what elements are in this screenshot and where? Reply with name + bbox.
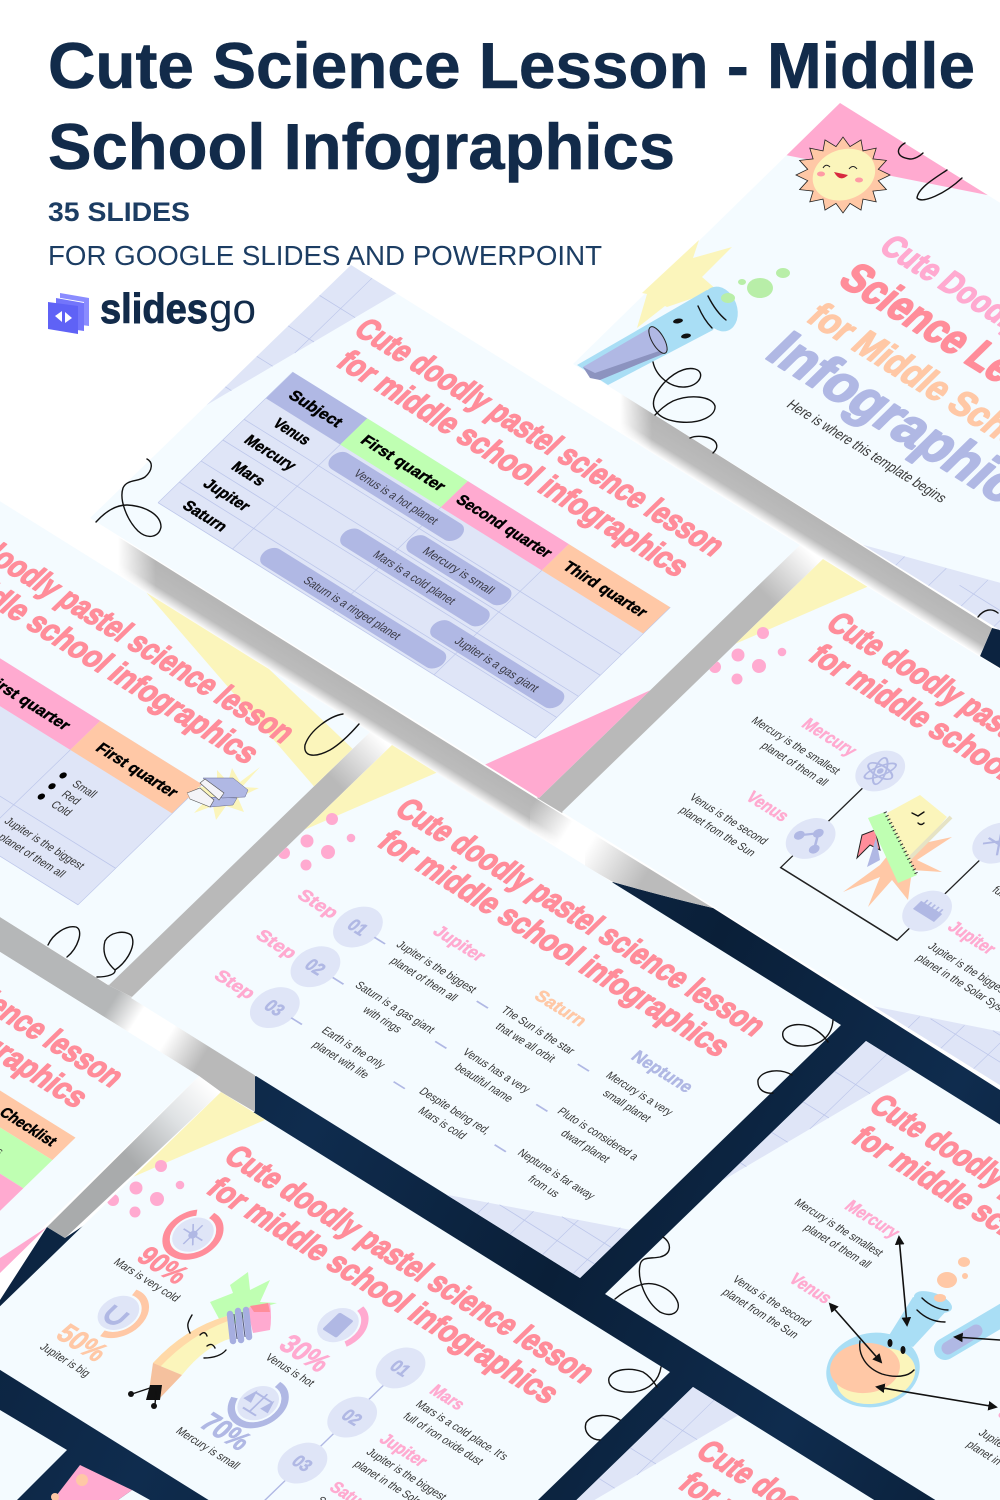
illustration: pencil character [128, 1272, 277, 1409]
stat 90% [111, 1196, 245, 1304]
step rows: Earth is the only [319, 1025, 388, 1071]
slide: ruler diagram [562, 559, 1000, 1092]
labels [707, 1176, 1000, 1500]
slide: steps [131, 745, 841, 1278]
labels: Mercury is the smallest [748, 715, 843, 777]
table: Mercury is small [419, 545, 497, 597]
icon: yellow burst [637, 240, 732, 328]
timeline: 02 [337, 1405, 367, 1429]
squiggles on lower slides [585, 610, 998, 1440]
step rows: Saturn is a gas giant [352, 980, 437, 1036]
title: for middle school infographics [199, 1171, 568, 1410]
step rows: 03 [260, 996, 290, 1020]
timeline [245, 1340, 548, 1500]
icon: sun [796, 137, 890, 213]
stat 70% [173, 1364, 305, 1472]
table [158, 372, 670, 738]
labels: Mercury [798, 715, 862, 760]
grey shadow bands between slides [0, 380, 992, 1238]
stat 30% [262, 1289, 382, 1389]
table: Saturn [178, 498, 231, 535]
table: Venus is a hot planet [350, 467, 442, 528]
icon: test tube [577, 268, 790, 385]
table: Second quarter [452, 492, 556, 562]
illustration: flask [820, 1257, 1000, 1415]
step rows: Mercury is a very [603, 1070, 676, 1119]
table: First quarter [356, 433, 449, 495]
step rows: dwarf planet [558, 1128, 612, 1165]
labels: Mercury is the smallest [791, 1197, 886, 1259]
labels: planet from the Sun [676, 805, 758, 859]
checklist table [0, 1067, 76, 1221]
labels: Venus is the second [686, 792, 770, 847]
slide: pink corner partial [51, 1465, 150, 1500]
squiggles on left slide [48, 714, 359, 977]
slide count: 35 SLIDES [48, 197, 190, 227]
timeline: Jupiter [375, 1430, 432, 1471]
step rows: with rings [359, 1004, 405, 1036]
step rows [200, 856, 710, 1222]
step rows: Step [251, 926, 302, 962]
step rows: 02 [300, 955, 330, 979]
icon blobs [775, 742, 1000, 939]
table: Mars [227, 459, 269, 490]
timeline: 03 [287, 1451, 317, 1475]
decorative dots: progress slide [107, 1160, 184, 1218]
step rows: Step [293, 885, 343, 922]
step rows: from us [525, 1174, 562, 1200]
step rows: that we all orbit [492, 1021, 558, 1065]
slide: table with quarters [90, 265, 800, 798]
labels: planet from the Sun [719, 1287, 801, 1341]
table: Mercury [240, 433, 300, 474]
labels: Venus is the second [729, 1274, 813, 1329]
timeline: Mars [425, 1381, 470, 1414]
step rows: Step [210, 966, 260, 1003]
title: Cute doodly pastel science lesson [217, 1138, 604, 1389]
step rows: Jupiter is the biggest [393, 939, 479, 996]
table: Third quarter [559, 559, 651, 621]
title: for middle school infographics [370, 824, 739, 1063]
table: Saturn is a ringed planet [300, 574, 404, 643]
title: Cute doodly pastel science lesson [388, 791, 775, 1042]
arrows [830, 1237, 1000, 1407]
table: Jupiter is the biggest [1, 815, 87, 872]
logo: slidesgo: slides [100, 285, 208, 332]
step rows: planet with life [309, 1039, 372, 1081]
stat 70%: Mercury is small [173, 1425, 242, 1472]
stat 90%: 90% [130, 1241, 195, 1290]
step rows: Mars is cold [415, 1105, 469, 1142]
step rows: Pluto is considered a [554, 1106, 642, 1163]
table: Cold [48, 799, 74, 819]
table: Red [58, 789, 83, 807]
step rows: small planet [600, 1088, 653, 1125]
table: Mars is a cold planet [370, 548, 459, 608]
labels: planet of them all [801, 1222, 874, 1271]
title: Cute doodly pastel science lesson [347, 311, 734, 562]
labels: Venus [785, 1270, 837, 1307]
step rows: Venus has a very [459, 1047, 533, 1096]
step rows: Despite being red, [416, 1086, 493, 1137]
illustration: ruler and set square [843, 795, 952, 907]
logo: slidesgo [48, 285, 256, 334]
table: Jupiter is a gas giant [451, 635, 542, 695]
labels: Venus [742, 788, 794, 825]
table: First quarter [92, 741, 181, 801]
decorative dots: ruler slide [709, 627, 786, 684]
header title [48, 29, 975, 183]
stat 70%: 70% [193, 1407, 258, 1456]
slide: bottom-left table remnant [0, 796, 199, 1329]
slide: bottom-left partial [0, 1410, 67, 1500]
header title: School Infographics [48, 110, 675, 183]
labels: Jupiter [943, 917, 1000, 958]
subtitle: FOR GOOGLE SLIDES AND POWERPOINT [48, 240, 602, 271]
squiggles on cover [653, 143, 962, 453]
labels: planet of them all [758, 740, 831, 789]
slide: progress percentages [0, 1092, 670, 1500]
stat 30%: 30% [273, 1329, 337, 1378]
table [0, 565, 202, 905]
table: Small [69, 778, 99, 801]
step rows: beautiful name [452, 1062, 516, 1105]
timeline: full of iron oxide dust [400, 1411, 486, 1467]
step rows: planet of them all [387, 955, 460, 1004]
pink corner on remnant slide [0, 1227, 47, 1273]
squiggle on table slide [96, 459, 161, 536]
slide: checklist table left [0, 452, 370, 985]
icon: books [184, 767, 260, 820]
step rows: The Sun is the star [498, 1004, 578, 1057]
timeline: Mars is a cold place. It's [413, 1399, 511, 1463]
step rows: Neptune is far away [515, 1147, 598, 1202]
table: Jupiter [199, 476, 254, 515]
stat 50%: Jupiter is big [37, 1341, 93, 1380]
logo: slidesgo: go [209, 285, 256, 332]
table: Venus [269, 416, 314, 449]
title: for middle school infographics [329, 344, 698, 583]
decorative dots: steps slide [278, 813, 355, 870]
slide: title cover [573, 103, 1000, 644]
timeline: 01 [385, 1356, 416, 1380]
header title: Cute Science Lesson - Middle [48, 29, 975, 102]
slide: title cover: Here is where this template begins [783, 397, 950, 506]
table: Subject [284, 388, 346, 431]
step rows: Jupiter [429, 922, 491, 965]
step rows: Saturn [530, 986, 592, 1030]
stat 90%: Mars is very cold [111, 1256, 182, 1304]
stat 30%: Venus is hot [262, 1352, 317, 1389]
stat 50% [37, 1275, 162, 1380]
labels: Mercury [841, 1197, 905, 1242]
stat 50%: 50% [50, 1319, 114, 1367]
navy backdrop between slides [0, 628, 1000, 1500]
slide: flask diagram [605, 1041, 1000, 1500]
labels [664, 694, 1000, 1022]
connector lines [781, 788, 979, 940]
step rows: 01 [343, 915, 373, 939]
slide: bottom partial [432, 1387, 1000, 1500]
step rows: Neptune [627, 1047, 698, 1096]
